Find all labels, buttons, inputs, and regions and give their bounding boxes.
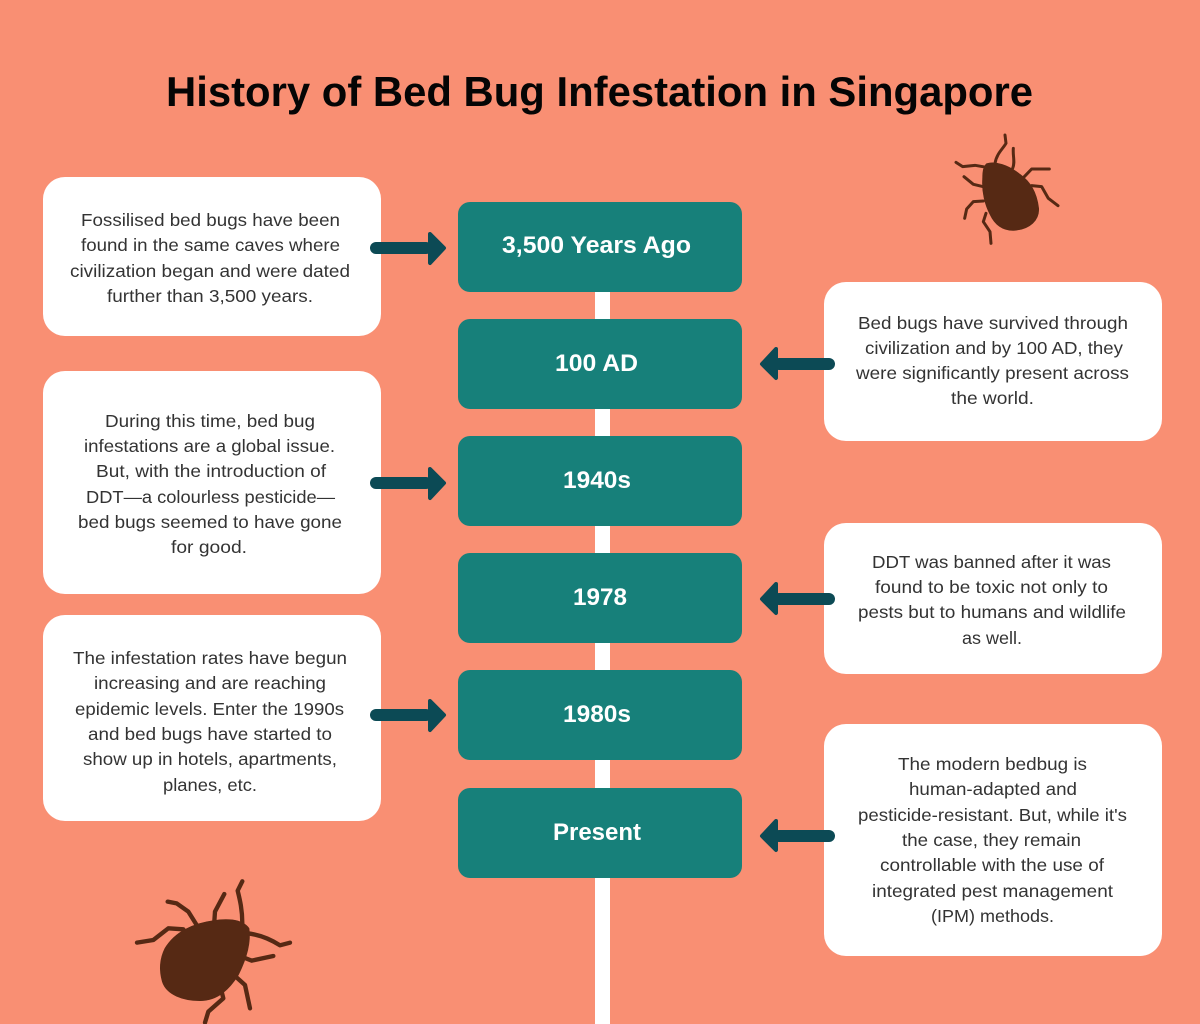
- timeline spine: [595, 285, 610, 1024]
- panel: present text: [824, 724, 1162, 956]
- timeline box: 100 AD: 100 AD: [555, 350, 638, 377]
- arrow: 1940s text to box: [370, 469, 444, 498]
- timeline box: 1940s: [458, 436, 742, 526]
- arrow: 1978 text to box: [762, 584, 835, 613]
- panel: present text: human-adapted and: [909, 779, 1077, 799]
- arrow: 1980s text to box: [370, 701, 444, 730]
- timeline box: 1978: 1978: [573, 584, 627, 611]
- panel: present text: controllable with the use of: [880, 855, 1104, 875]
- timeline box: 100 AD: [458, 319, 742, 409]
- panel: 1978 text: found to be toxic not only to: [875, 577, 1108, 597]
- timeline box: Present: Present: [553, 819, 641, 846]
- panel: 1940s text: infestations are a global issue.: [84, 436, 335, 456]
- timeline box: 3,500 Years Ago: 3,500 Years Ago: [502, 232, 691, 259]
- icon: bed bug top right: [956, 135, 1058, 243]
- timeline box: 1940s: 1940s: [563, 467, 631, 494]
- arrow: fossil text to 3,500 Years Ago: [370, 234, 444, 263]
- panel: 100 AD text: Bed bugs have survived through: [858, 313, 1128, 333]
- timeline box: 3,500 Years Ago: [458, 202, 742, 292]
- title: History of Bed Bug Infestation in Singapore: [166, 68, 1033, 115]
- panel: 1978 text: [824, 523, 1162, 674]
- timeline box: 1978: [458, 553, 742, 643]
- icon: bed bug bottom left: [137, 881, 290, 1023]
- panel: 1980s text: increasing and are reaching: [94, 673, 326, 693]
- panel: 100 AD text: [824, 282, 1162, 441]
- panel: 1940s text: for good.: [171, 537, 247, 557]
- panel: present text: the case, they remain: [902, 830, 1081, 850]
- panel: 1940s text: DDT—a colourless pesticide—: [86, 487, 336, 507]
- panel: 100 AD text: were significantly present across: [855, 363, 1129, 383]
- panel: fossilised bed bugs: further than 3,500 years.: [107, 286, 313, 306]
- timeline box: 1980s: 1980s: [563, 701, 631, 728]
- arrow: present text to box: [762, 821, 835, 850]
- panel: present text: (IPM) methods.: [931, 906, 1054, 926]
- panel: 1980s text: and bed bugs have started to: [88, 724, 332, 744]
- panel: present text: The modern bedbug is: [898, 754, 1087, 774]
- panel: 1978 text: as well.: [962, 628, 1022, 648]
- panel: 1978 text: DDT was banned after it was: [872, 552, 1111, 572]
- panel: 1978 text: pests but to humans and wildlife: [858, 602, 1126, 622]
- timeline box: 1980s: [458, 670, 742, 760]
- panel: 1980s text: The infestation rates have begun: [73, 648, 347, 668]
- panel: 1940s text: During this time, bed bug: [105, 411, 315, 431]
- panel: fossilised bed bugs: [43, 177, 381, 336]
- panel: 1940s text: bed bugs seemed to have gone: [78, 512, 342, 532]
- panel: present text: pesticide-resistant. But, while it's: [858, 805, 1127, 825]
- panel: 100 AD text: the world.: [951, 388, 1034, 408]
- panel: present text: integrated pest management: [872, 881, 1113, 901]
- panel: 100 AD text: civilization and by 100 AD, they: [865, 338, 1123, 358]
- arrow: 100 AD text to box: [762, 349, 835, 378]
- panel: 1980s text: epidemic levels. Enter the 1990s: [75, 699, 344, 719]
- panel: fossilised bed bugs: found in the same caves where: [81, 235, 340, 255]
- panel: 1980s text: planes, etc.: [163, 775, 257, 795]
- panel: 1940s text: [43, 371, 381, 594]
- panel: fossilised bed bugs: civilization began and were dated: [70, 261, 350, 281]
- panel: 1980s text: [43, 615, 381, 821]
- timeline box: Present: [458, 788, 742, 878]
- panel: 1980s text: show up in hotels, apartments,: [83, 749, 337, 769]
- panel: fossilised bed bugs: Fossilised bed bugs have been: [81, 210, 340, 230]
- panel: 1940s text: But, with the introduction of: [96, 461, 326, 481]
